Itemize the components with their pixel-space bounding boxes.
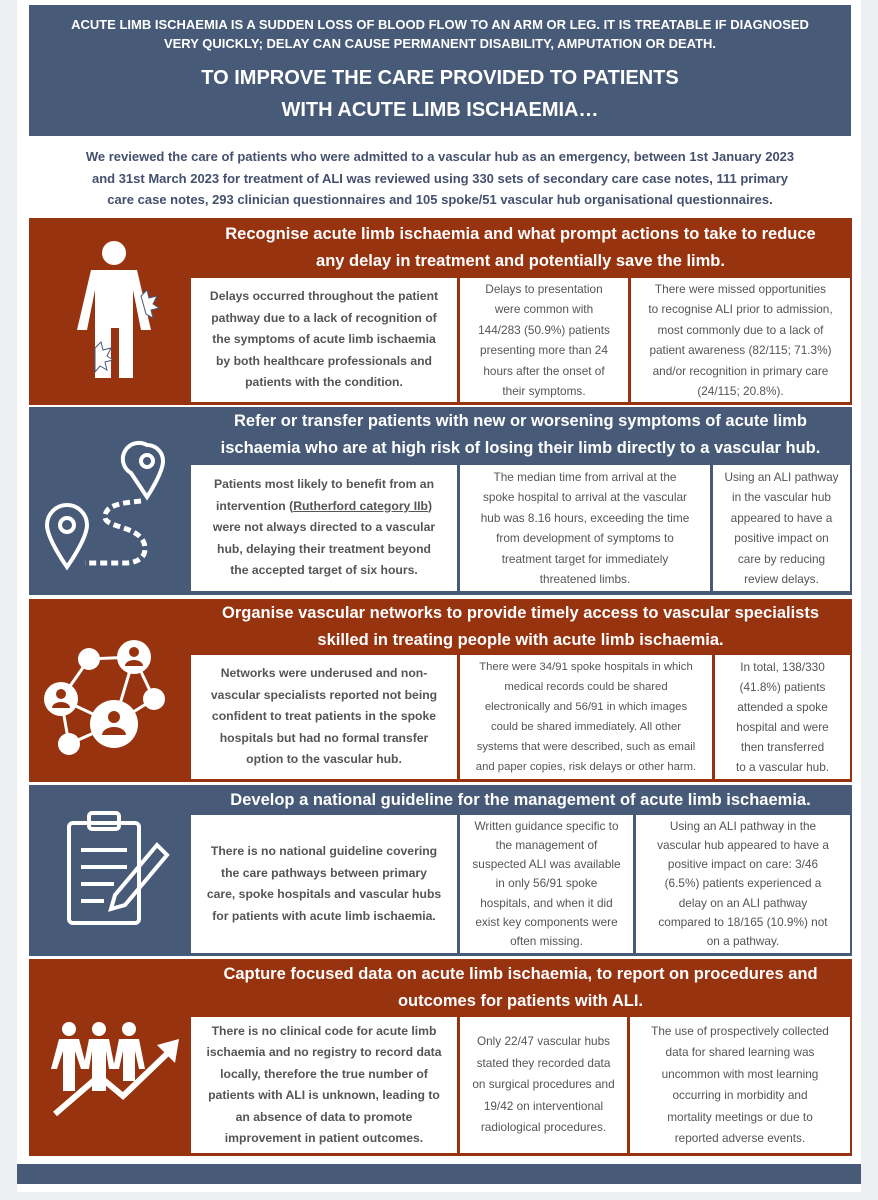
cell 1 <box>191 655 457 779</box>
cell 2: Delays to presentation <box>485 282 603 296</box>
cell 2: treatment target for immediately <box>502 552 668 566</box>
cell 3: to recognise ALI prior to admission, <box>648 302 833 316</box>
cell 3: to a vascular hub. <box>736 760 829 774</box>
cell 2: suspected ALI was available <box>472 857 621 871</box>
cell 3: patient awareness (82/115; 71.3%) <box>649 343 832 357</box>
cell 1: vascular specialists reported not being <box>211 688 437 702</box>
cell 1: Delays occurred throughout the patient <box>210 289 438 303</box>
cell 3: Using an ALI pathway in the <box>670 819 816 833</box>
section title: Capture focused data on acute limb ischaemia, to report on procedures and <box>223 965 818 983</box>
section title: skilled in treating people with acute limb ischaemia. <box>317 631 724 649</box>
panel: refer <box>29 407 852 595</box>
icon: map pins route <box>45 440 165 570</box>
cell 2: could be shared immediately. All other <box>491 721 681 733</box>
cell 3: attended a spoke <box>737 700 828 714</box>
intro text: care case notes, 293 clinician questionnaires and 105 spoke/51 vascular hub organisational questionnaires. <box>107 192 773 207</box>
cell 3: on a pathway. <box>707 934 779 948</box>
cell 2: medical records could be shared <box>504 681 668 693</box>
cell 1 <box>191 815 457 953</box>
cell 1: There is no clinical code for acute limb <box>212 1024 436 1038</box>
cell 1: locally, therefore the true number of <box>220 1066 428 1080</box>
cell 3: reported adverse events. <box>675 1131 805 1145</box>
cell 3: compared to 18/165 (10.9%) not <box>658 915 828 929</box>
cell 2: electronically and 56/91 in which images <box>485 701 687 713</box>
section title: Refer or transfer patients with new or worsening symptoms of acute limb <box>234 412 807 430</box>
cell 2: Only 22/47 vascular hubs <box>477 1034 610 1048</box>
cell 1: Networks were underused and non- <box>221 666 427 680</box>
cell 1: improvement in patient outcomes. <box>225 1131 423 1145</box>
cell 2: in only 56/91 spoke <box>496 876 597 890</box>
cell 1: the accepted target of six hours. <box>230 563 418 577</box>
cell 2: There were 34/91 spoke hospitals in which <box>479 661 693 673</box>
header title: TO IMPROVE THE CARE PROVIDED TO PATIENTS <box>201 67 679 89</box>
intro text <box>86 149 794 207</box>
cell 2: were common with <box>495 302 593 316</box>
cell 3 <box>713 465 850 591</box>
cell 3: positive impact on care: 3/46 <box>668 857 818 871</box>
cell 2: 19/42 on interventional <box>484 1099 603 1113</box>
cell 3: in the vascular hub <box>732 490 831 504</box>
icon: people with rising arrow <box>51 1022 179 1116</box>
cell 1: patients with the condition. <box>245 375 403 389</box>
cell 3: most commonly due to a lack of <box>658 322 823 336</box>
cell 3 <box>636 815 850 953</box>
cell 3 <box>630 1017 850 1153</box>
cell 2: and paper copies, risk delays or other harm. <box>476 761 696 773</box>
cell 3: (41.8%) patients <box>740 680 825 694</box>
cell 1 <box>191 465 457 591</box>
cell 1: for patients with acute limb ischaemia. <box>212 908 436 922</box>
cell 2: presenting more than 24 <box>480 343 608 357</box>
cell 1: were not always directed to a vascular <box>213 520 435 534</box>
cell 3: data for shared learning was <box>666 1045 814 1059</box>
footer bar <box>17 1164 861 1184</box>
cell 2 <box>460 1017 627 1153</box>
section title: any delay in treatment and potentially save the limb. <box>316 252 725 270</box>
header title: WITH ACUTE LIMB ISCHAEMIA… <box>281 99 598 121</box>
header subtitle: VERY QUICKLY; DELAY CAN CAUSE PERMANENT DISABILITY, AMPUTATION OR DEATH. <box>164 36 716 51</box>
cell 3: (24/115; 20.8%). <box>697 384 784 398</box>
icon: clipboard and pen <box>67 811 170 925</box>
cell 3: appeared to have a <box>731 510 832 524</box>
section title: outcomes for patients with ALI. <box>398 992 643 1010</box>
cell 2: hospitals, and when it did <box>480 896 613 910</box>
cell 3: care by reducing <box>738 552 825 566</box>
cell 3: and/or recognition in primary care <box>653 364 828 378</box>
cell 3: (6.5%) patients experienced a <box>665 876 821 890</box>
cell 2: spoke hospital to arrival at the vascular <box>483 490 687 504</box>
cell 2: The median time from arrival at the <box>494 470 676 484</box>
cell 2: Written guidance specific to <box>474 819 619 833</box>
icon: person with pain <box>77 241 160 378</box>
cell 3: mortality meetings or due to <box>667 1110 813 1124</box>
panel: guideline <box>29 785 852 956</box>
cell 1: intervention (Rutherford category IIb) <box>216 499 432 513</box>
cell 2: hub was 8.16 hours, exceeding the time <box>481 510 689 524</box>
cell 1: the care pathways between primary <box>221 866 427 880</box>
cell 3: positive impact on <box>734 531 829 545</box>
section title <box>222 604 819 649</box>
cell 3: Using an ALI pathway <box>724 470 839 484</box>
cell 1: hub, delaying their treatment beyond <box>217 542 431 556</box>
cell 1: patients with ALI is unknown, leading to <box>208 1088 440 1102</box>
cell 2: 144/283 (50.9%) patients <box>478 322 610 336</box>
header banner <box>29 5 851 136</box>
cell 2: threatened limbs. <box>540 572 630 586</box>
cell 2 <box>460 278 628 402</box>
cell 3: delay on an ALI pathway <box>679 896 807 910</box>
section title <box>225 225 816 270</box>
cell 1 <box>191 278 457 402</box>
cell 1: the symptoms of acute limb ischaemia <box>212 332 436 346</box>
cell 1: pathway due to a lack of recognition of <box>211 311 437 325</box>
header subtitle <box>71 17 809 51</box>
cell 3: then transferred <box>741 740 824 754</box>
cell 2 <box>460 815 633 953</box>
cell 3: hospital and were <box>736 720 829 734</box>
cell 2: stated they recorded data <box>477 1056 610 1070</box>
cell 1 <box>191 1017 457 1153</box>
cell 3: uncommon with most learning <box>662 1066 818 1080</box>
cell 1: ischaemia and no registry to record data <box>206 1045 442 1059</box>
cell 2: radiological procedures. <box>481 1120 606 1134</box>
cell 2: often missing. <box>510 934 583 948</box>
cell 3: vascular hub appeared to have a <box>657 838 829 852</box>
icon: network of people <box>44 640 165 755</box>
cell 3: There were missed opportunities <box>655 282 826 296</box>
cell 2: from development of symptoms to <box>496 531 674 545</box>
section title: Recognise acute limb ischaemia and what prompt actions to take to reduce <box>225 225 816 243</box>
cell 2: their symptoms. <box>502 384 586 398</box>
cell 3: review delays. <box>744 572 819 586</box>
panel: recognise <box>29 218 852 405</box>
cell 2: hours after the onset of <box>483 364 605 378</box>
panel: data <box>29 959 852 1156</box>
intro text: and 31st March 2023 for treatment of ALI was reviewed using 330 sets of secondary care case notes, 111 primary <box>92 170 788 186</box>
section title <box>221 412 820 457</box>
cell 3 <box>631 278 850 402</box>
cell 1: hospitals but had no formal transfer <box>220 731 428 745</box>
section title: Develop a national guideline for the management of acute limb ischaemia. <box>230 790 811 808</box>
cell 1: option to the vascular hub. <box>246 752 402 766</box>
cell 1: an absence of data to promote <box>236 1110 412 1124</box>
section title: Organise vascular networks to provide timely access to vascular specialists <box>222 604 819 622</box>
cell 2: the management of <box>496 838 597 852</box>
panel: networks <box>29 599 852 782</box>
header title <box>201 67 679 121</box>
cell 1: Patients most likely to benefit from an <box>214 477 434 491</box>
intro text: We reviewed the care of patients who were admitted to a vascular hub as an emergency, between 1st January 2023 <box>86 149 794 164</box>
cell 3: occurring in morbidity and <box>672 1088 808 1102</box>
cell 3 <box>715 655 850 779</box>
cell 2: systems that were described, such as email <box>477 741 695 753</box>
cell 3: The use of prospectively collected <box>651 1024 829 1038</box>
cell 2: on surgical procedures and <box>472 1077 615 1091</box>
header subtitle: ACUTE LIMB ISCHAEMIA IS A SUDDEN LOSS OF BLOOD FLOW TO AN ARM OR LEG. IT IS TREATABLE IF DIAGNOSED <box>71 17 809 32</box>
cell 2: exist key components were <box>475 915 618 929</box>
cell 3: In total, 138/330 <box>740 660 825 674</box>
section title <box>223 965 818 1010</box>
cell 1: by both healthcare professionals and <box>216 354 432 368</box>
cell 1: care, spoke hospitals and vascular hubs <box>207 887 441 901</box>
cell 2 <box>460 465 710 591</box>
cell 1: confident to treat patients in the spoke <box>212 709 436 723</box>
section title: ischaemia who are at high risk of losing their limb directly to a vascular hub. <box>221 439 820 457</box>
cell 1: There is no national guideline covering <box>211 844 437 858</box>
cell 2 <box>460 655 712 779</box>
